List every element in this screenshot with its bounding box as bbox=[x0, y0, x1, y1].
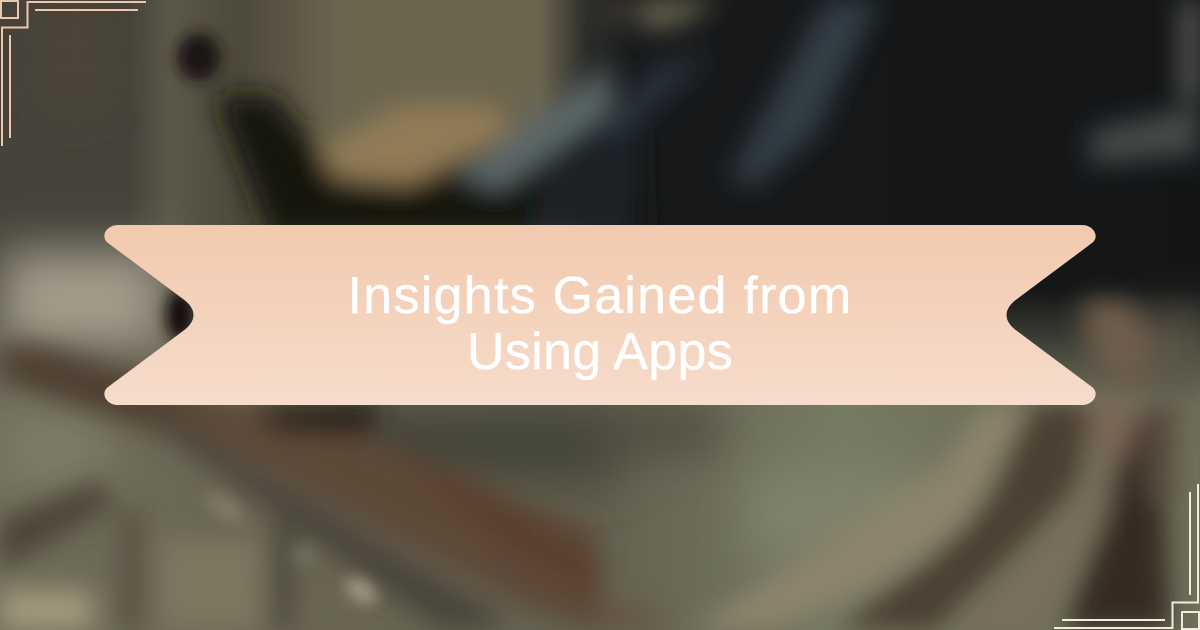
corner ornament: top left bbox=[0, 0, 146, 146]
corner ornament: bottom right bbox=[1054, 484, 1200, 630]
title: Using Apps bbox=[467, 323, 733, 381]
title bbox=[348, 267, 852, 381]
title: Insights Gained from bbox=[348, 267, 852, 325]
